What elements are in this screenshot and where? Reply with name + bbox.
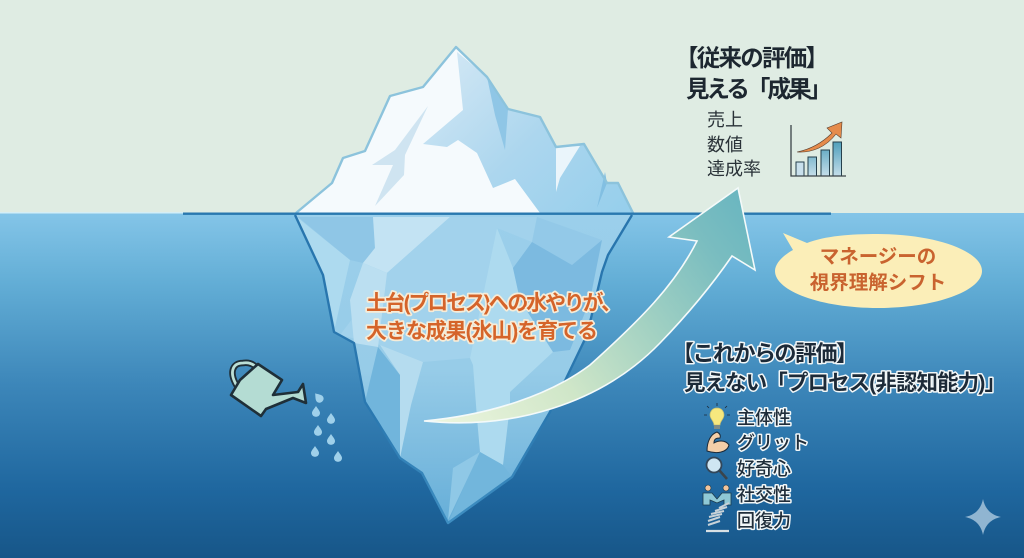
water drops — [311, 391, 342, 462]
bubble shape — [775, 233, 982, 308]
iceberg below water — [295, 215, 632, 523]
growth arrow — [424, 188, 755, 423]
can handle — [232, 363, 256, 386]
iceberg caption: 大きな成果(氷山)を育てる — [366, 319, 598, 343]
list: visible results: 売上 — [707, 110, 743, 130]
item: curiosity: 好奇心 — [737, 459, 791, 479]
item: resilience: 回復力 — [737, 511, 791, 531]
icon: light bulb — [704, 403, 730, 429]
list: visible results: 達成率 — [707, 159, 761, 179]
bubble text — [810, 246, 946, 294]
heading: future evaluation — [672, 341, 1006, 395]
list: visible results: 数値 — [707, 135, 743, 155]
iceberg caption — [366, 291, 622, 343]
item: grit: グリット — [737, 433, 809, 453]
water background — [0, 213, 1024, 558]
heading: conventional evaluation: 【従来の評価】 — [675, 45, 829, 71]
watering can — [231, 363, 306, 416]
bubble text: マネージーの — [820, 246, 936, 268]
iceberg — [295, 47, 633, 523]
icon: magnifier — [706, 458, 727, 479]
waterline — [0, 212, 831, 215]
sky background — [0, 0, 1024, 213]
icon: flexed arm — [707, 432, 729, 453]
icon: spring — [706, 503, 729, 531]
icon: sparkle — [965, 499, 1001, 535]
iceberg caption: 土台(プロセス)への水やりが、 — [366, 291, 622, 315]
iceberg above water — [296, 47, 633, 213]
can body and spout — [231, 364, 306, 416]
bubble text: 視界理解シフト — [810, 272, 946, 294]
icon: two people — [703, 485, 731, 505]
item: sociability: 社交性 — [737, 485, 791, 505]
heading: conventional evaluation — [675, 45, 832, 102]
item: initiative: 主体性 — [737, 408, 791, 428]
heading: future evaluation: 【これからの評価】 — [672, 341, 858, 366]
heading: future evaluation: 見えない「プロセス(非認知能力)」 — [684, 371, 1006, 395]
list: visible results — [707, 110, 761, 179]
list: invisible process skills — [703, 403, 809, 531]
icon: growth chart — [791, 122, 846, 176]
heading: conventional evaluation: 見える「成果」 — [686, 76, 832, 102]
speech bubble — [775, 233, 982, 308]
